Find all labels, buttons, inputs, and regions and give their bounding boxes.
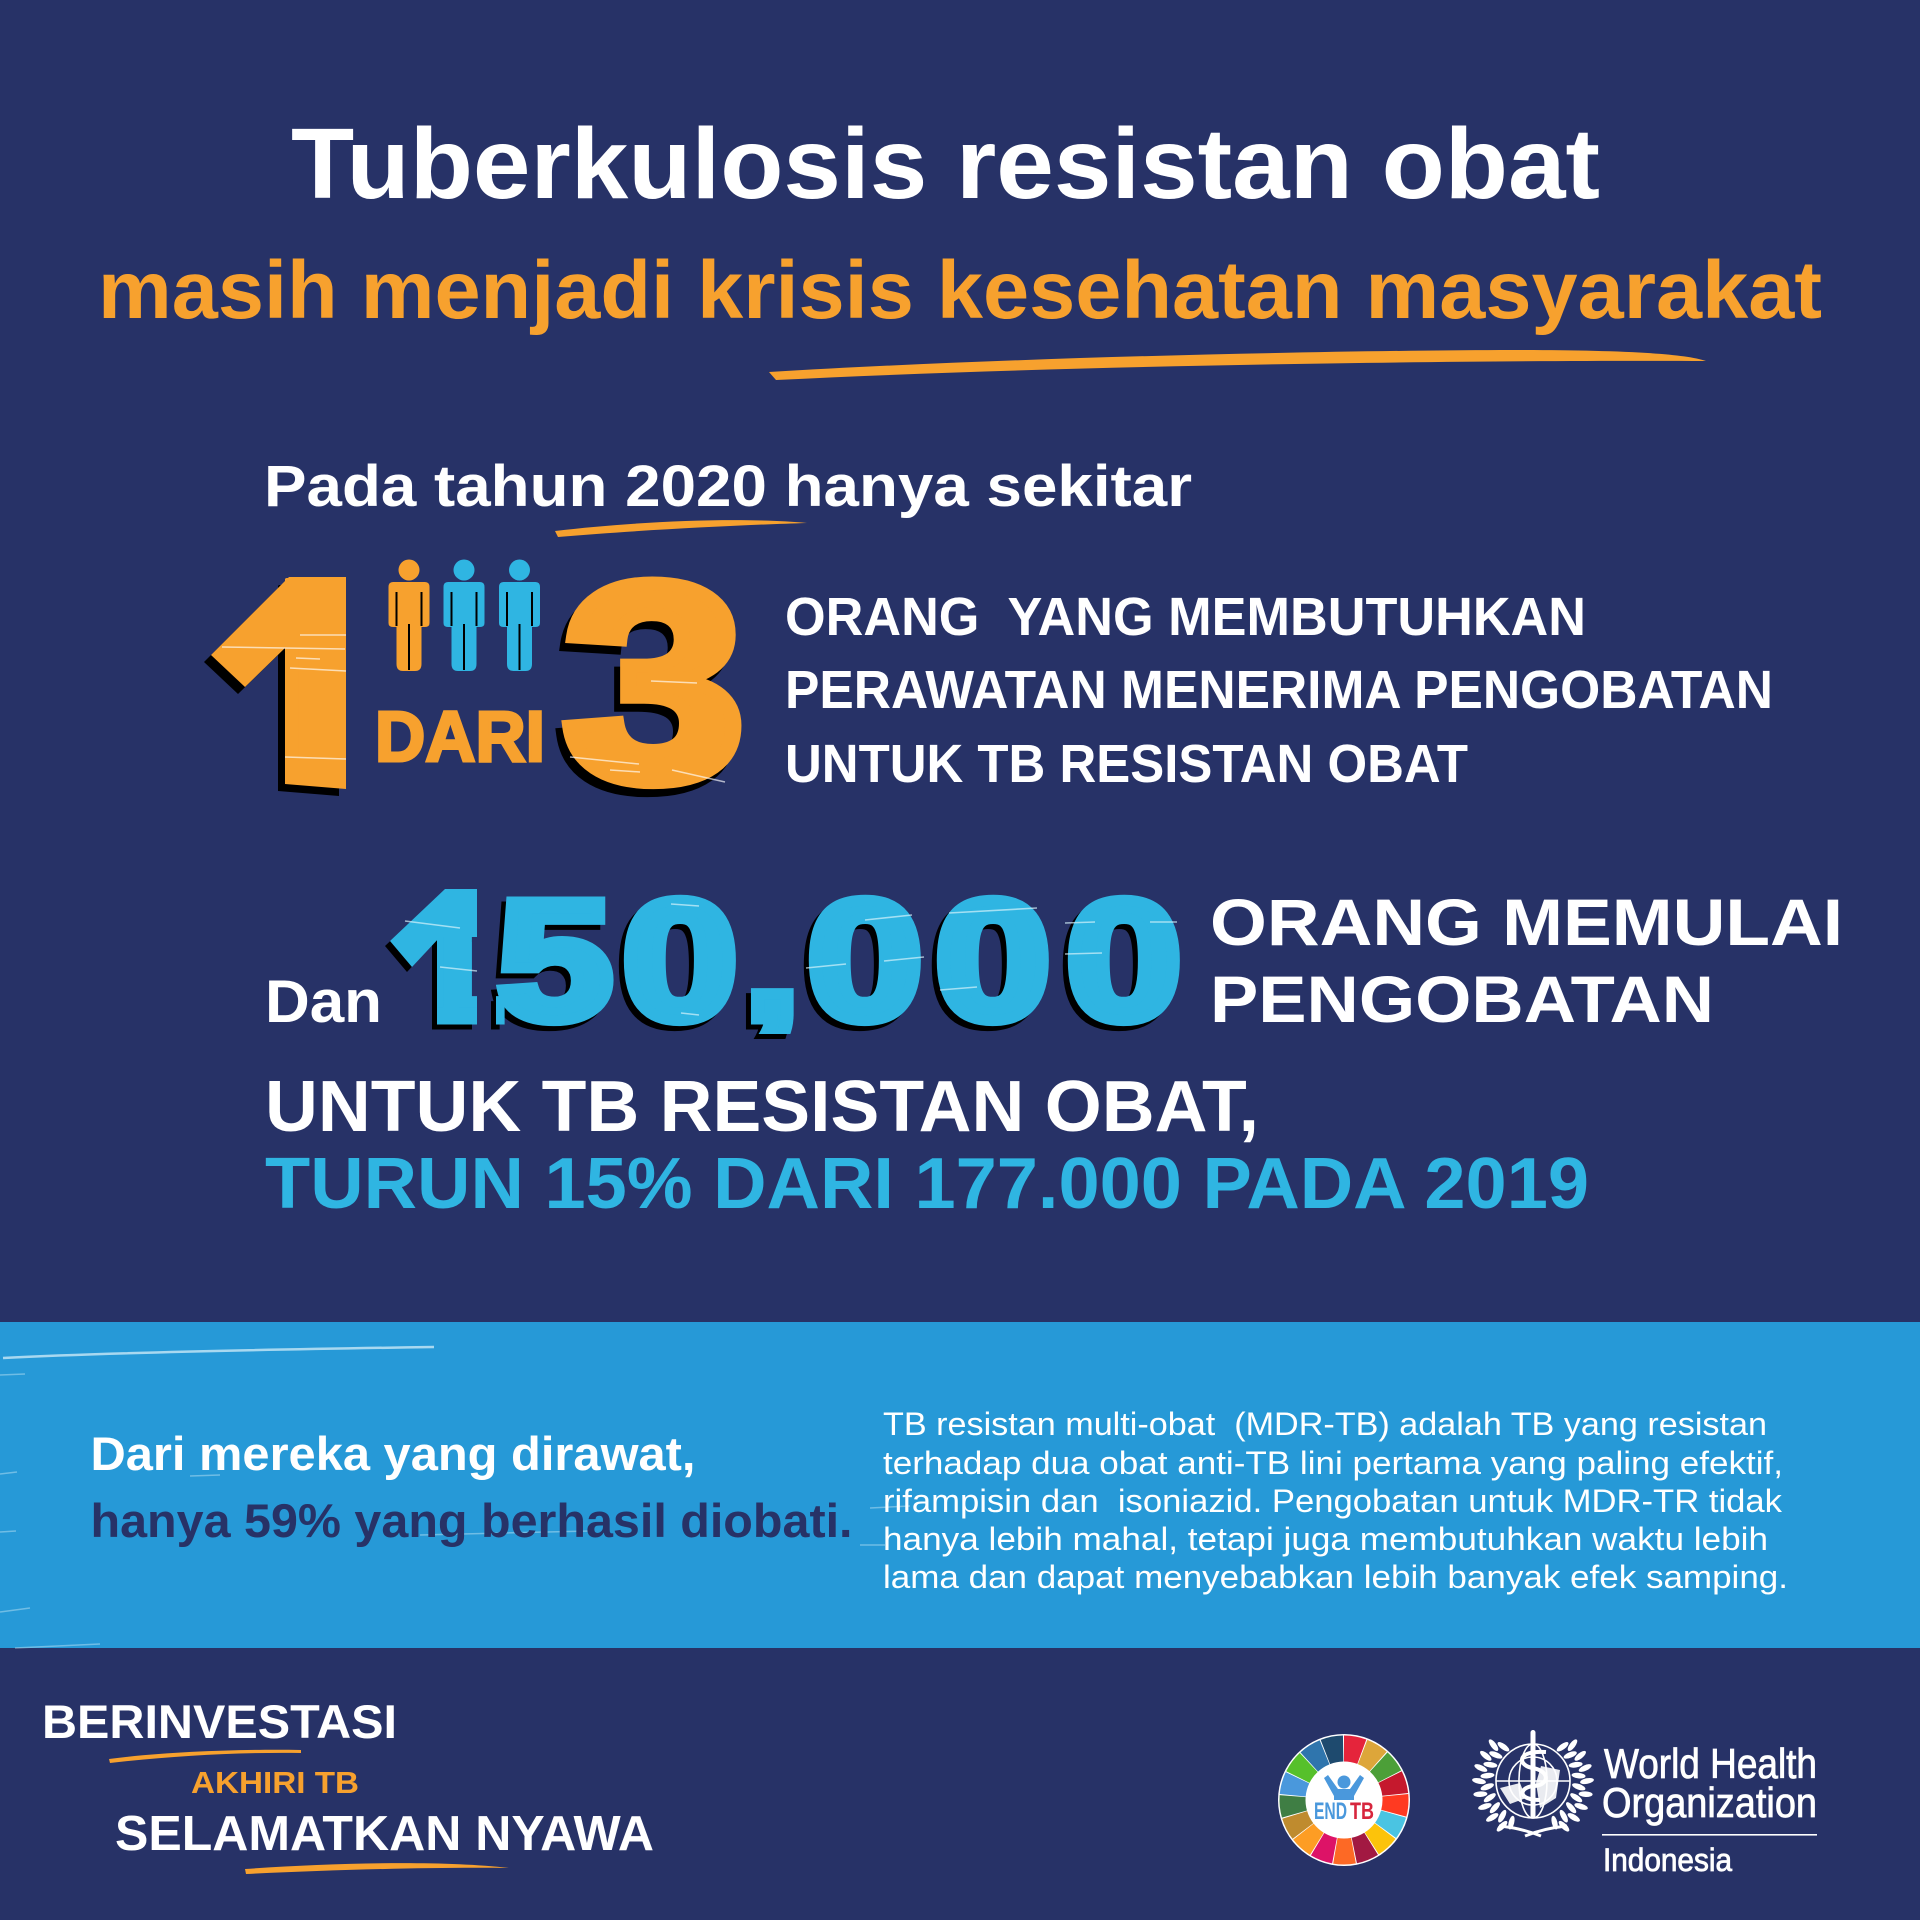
big number 150,000: 150,000 (388, 866, 1182, 1056)
text block: MDR-TB definition (883, 1406, 1788, 1595)
text block: MDR-TB definition: rifampisin dan isoniazid. Pengobatan untuk MDR-TR tidak (883, 1483, 1783, 1519)
logo: End TB: TB (1350, 1798, 1374, 1825)
callout: treatment success: Dari mereka yang dirawat, (90, 1427, 696, 1480)
statement: orang yang membutuhkan (785, 587, 1773, 794)
statement: orang yang membutuhkan: UNTUK TB RESISTAN OBAT (785, 734, 1468, 794)
text block: MDR-TB definition: TB resistan multi-obat (MDR-TB) adalah TB yang resistan (883, 1406, 1767, 1442)
statement: orang memulai pengobatan (1210, 885, 1843, 1036)
statement: turun 15 persen: TURUN 15% DARI 177.000 PADA 2019 (265, 1144, 1589, 1224)
slogan: SELAMATKAN NYAWA (115, 1807, 654, 1861)
word Dan: Dan (265, 968, 382, 1035)
icon: blue person (499, 560, 540, 671)
slogan underline (109, 1750, 301, 1763)
callout: treatment success (90, 1427, 853, 1547)
statement: orang yang membutuhkan: ORANG YANG MEMBUTUHKAN (785, 587, 1586, 647)
statement: orang memulai pengobatan: ORANG MEMULAI (1210, 885, 1843, 959)
slogan underline (245, 1863, 509, 1874)
logo: End TB (1271, 1727, 1417, 1873)
logo: WHO wordmark (1602, 1740, 1817, 1878)
statement: orang yang membutuhkan: PERAWATAN MENERIMA PENGOBATAN (785, 660, 1773, 720)
logo: WHO wordmark: World Health (1604, 1740, 1817, 1787)
text block: MDR-TB definition: lama dan dapat menyebabkan lebih banyak efek samping. (883, 1559, 1788, 1595)
text block: MDR-TB definition: terhadap dua obat anti-TB lini pertama yang paling efektif, (883, 1445, 1783, 1481)
logo: WHO wordmark: Organization (1602, 1779, 1817, 1826)
logo: WHO wordmark: Indonesia (1603, 1842, 1732, 1878)
statement: orang memulai pengobatan: PENGOBATAN (1210, 962, 1714, 1036)
big numeral 1 (204, 577, 346, 796)
logo: End TB: END (1314, 1798, 1347, 1825)
slogan: BERINVESTASI (42, 1695, 397, 1748)
slogan: AKHIRI TB (191, 1765, 359, 1800)
slogan (42, 1695, 654, 1874)
text block: MDR-TB definition: hanya lebih mahal, tetapi juga membutuhkan waktu lebih (883, 1521, 1768, 1557)
icon: blue person (444, 560, 484, 671)
big numeral 1: 1 (204, 527, 402, 842)
intro text: Pada tahun 2020 hanya sekitar (264, 454, 1192, 519)
statistic: 1 dari 3 (204, 525, 745, 842)
big numeral 3: 3 (563, 525, 745, 839)
title: Tuberkulosis resistan obat (291, 108, 1600, 220)
year brush underline (555, 520, 807, 537)
word DARI: DARI (375, 698, 545, 777)
icon: one orange person (388, 560, 430, 671)
subtitle brush underline (769, 350, 1706, 380)
logo: WHO emblem (1472, 1730, 1594, 1836)
panel: blue band (0, 1322, 1920, 1648)
callout: treatment success: hanya 59% yang berhasil diobati. (90, 1494, 853, 1547)
subtitle: masih menjadi krisis kesehatan masyarakat (98, 245, 1822, 336)
statement: untuk TB resistan obat: UNTUK TB RESISTAN OBAT, (265, 1067, 1259, 1147)
